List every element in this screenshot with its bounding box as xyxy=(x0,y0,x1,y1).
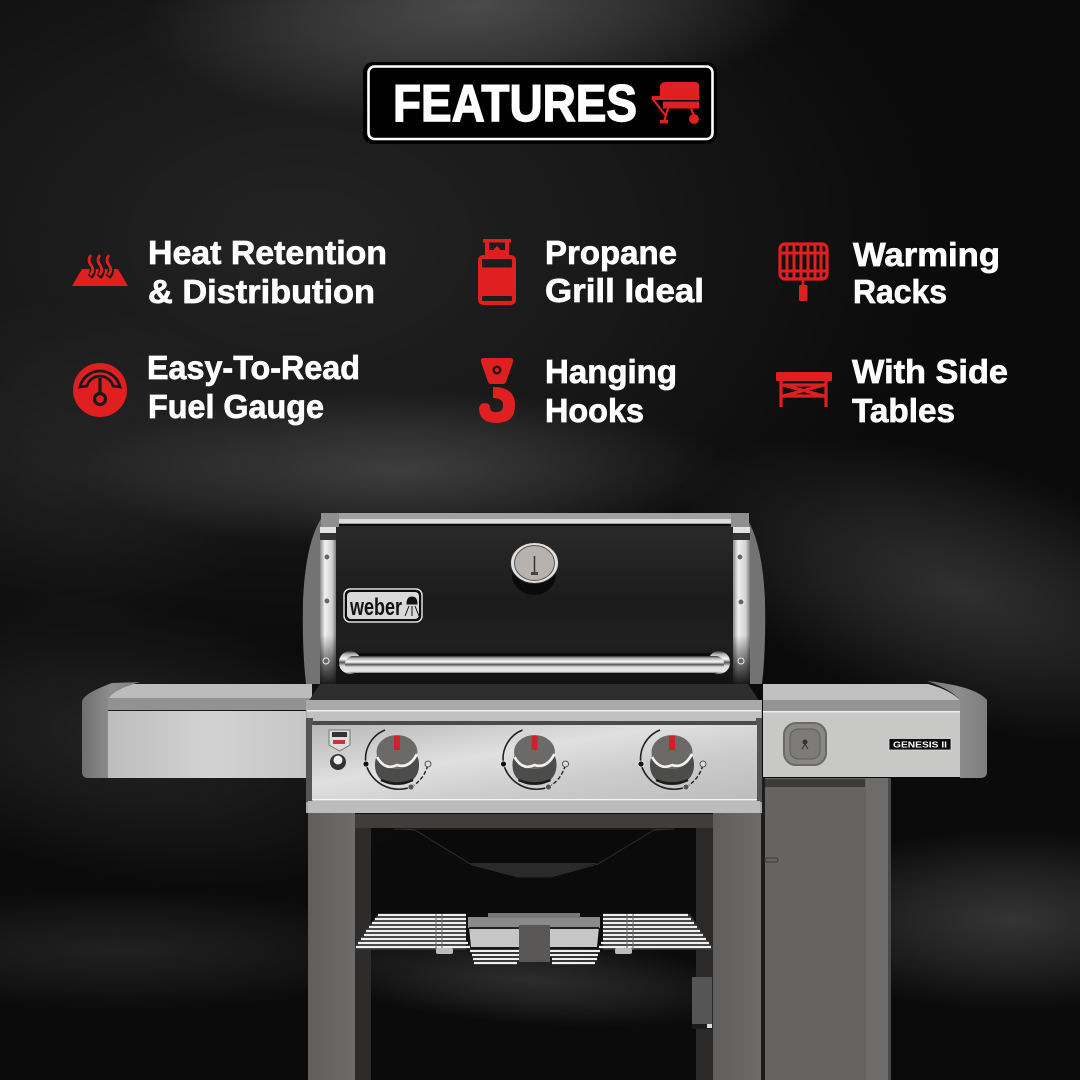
funnel under cookbox xyxy=(394,829,675,877)
knob 2 xyxy=(500,730,568,790)
label xyxy=(852,353,1008,429)
icon: gauge xyxy=(73,363,127,417)
label xyxy=(853,236,1000,310)
weber badge: weber xyxy=(349,594,402,621)
right side table xyxy=(763,681,987,778)
label xyxy=(148,234,387,310)
label: Hooks xyxy=(545,392,644,429)
label xyxy=(545,353,677,429)
left side table xyxy=(82,682,312,778)
bottom shelf with tray xyxy=(355,913,713,963)
side burner cover xyxy=(784,723,826,765)
feature: Warming Racks xyxy=(780,236,1000,310)
title badge: FEATURES xyxy=(363,62,717,144)
status badge and igniter xyxy=(329,730,350,770)
feature: With Side Tables xyxy=(776,353,1008,429)
handle xyxy=(338,651,730,674)
feature: Heat Retention & Distribution xyxy=(72,234,387,310)
label: Easy-To-Read xyxy=(147,349,360,386)
label: Propane xyxy=(545,234,677,271)
feature: Easy-To-Read Fuel Gauge xyxy=(73,349,360,425)
label: Tables xyxy=(852,392,955,429)
label: Warming xyxy=(853,236,1000,273)
knob 3 xyxy=(638,730,706,790)
icon: propane tank xyxy=(478,239,516,305)
GENESIS II badge xyxy=(889,738,951,750)
label xyxy=(147,349,360,425)
lid xyxy=(303,512,765,684)
label: Hanging xyxy=(545,353,677,390)
label: Racks xyxy=(853,273,947,310)
thermometer xyxy=(510,542,558,595)
icon: red grill xyxy=(652,82,700,124)
door latch xyxy=(692,977,712,1029)
label: Grill Ideal xyxy=(545,272,704,309)
feature: Hanging Hooks xyxy=(479,353,677,429)
heading text: FEATURES xyxy=(393,75,637,133)
right cabinet door xyxy=(761,778,891,1080)
grill illustration xyxy=(82,512,987,1080)
label: With Side xyxy=(852,353,1008,390)
label: Fuel Gauge xyxy=(148,388,324,425)
feature: Propane Grill Ideal xyxy=(478,234,704,309)
control panel xyxy=(306,700,762,813)
left and right legs xyxy=(308,812,761,1080)
GENESIS II badge: GENESIS II xyxy=(893,740,947,750)
knob 1 xyxy=(363,730,431,790)
icon: hook xyxy=(479,358,515,423)
label: Heat Retention xyxy=(148,234,387,271)
icon: heat plate xyxy=(72,255,128,286)
icon: table xyxy=(776,372,832,407)
label xyxy=(545,234,704,309)
cookbox band under lid xyxy=(308,684,760,702)
icon: grill rack xyxy=(780,244,827,301)
label: & Distribution xyxy=(148,273,375,310)
